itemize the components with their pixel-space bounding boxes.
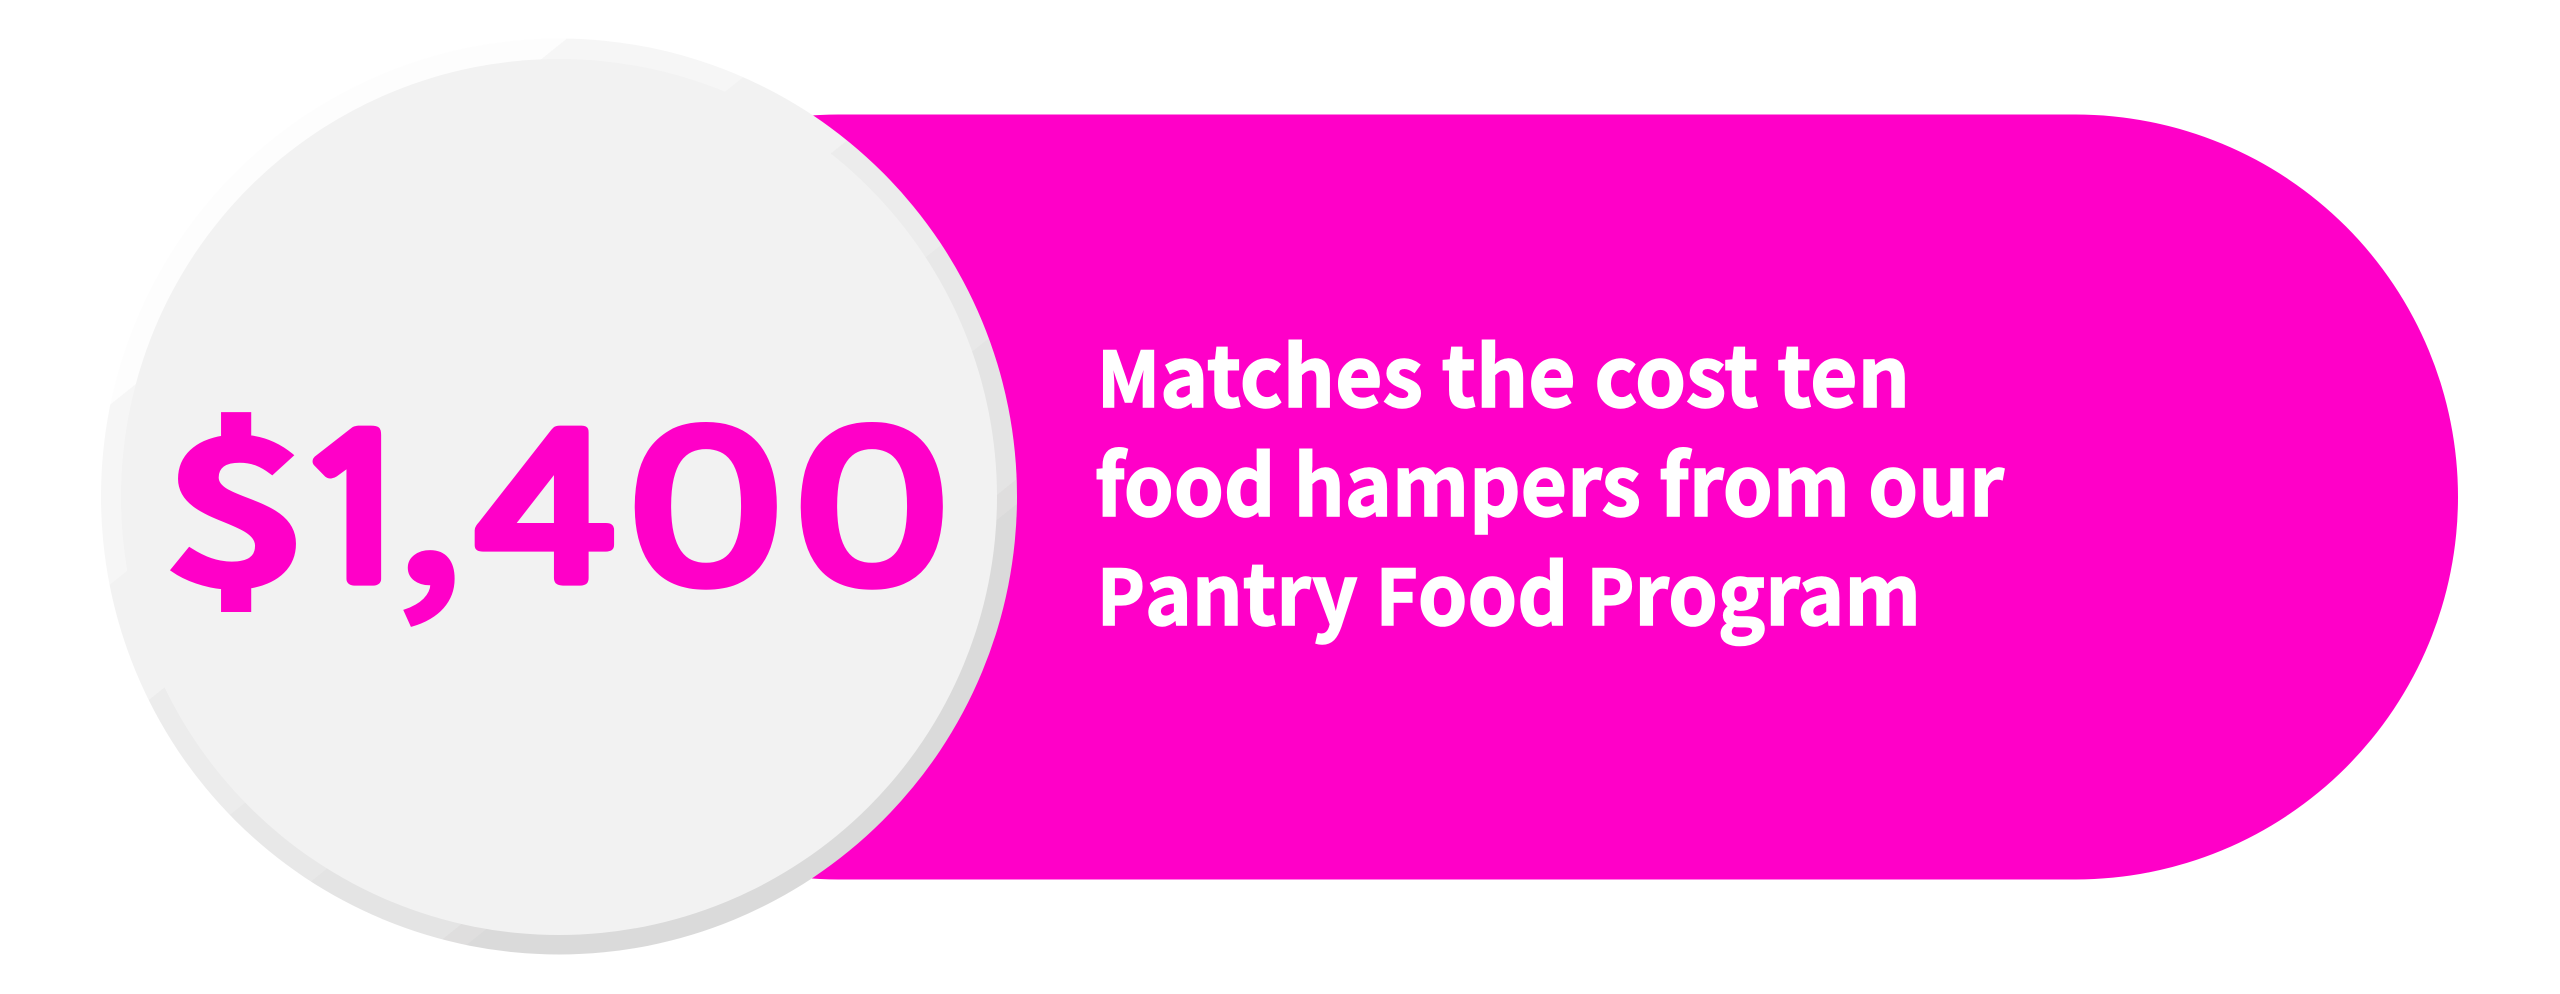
amount: $1,400: 4 — [473, 413, 616, 611]
panel: magenta pill — [456, 114, 2458, 880]
text line 3: Pantry Food Program — [1097, 529, 1921, 650]
circle: banded outer ring — [101, 38, 1017, 954]
amount: $1,400: , — [393, 365, 465, 640]
text block: description — [1095, 311, 2004, 650]
amount: $1,400: 1 — [287, 413, 430, 611]
text line 1: Matches the cost ten — [1097, 311, 1910, 432]
circle: inner disc — [121, 59, 997, 935]
circle badge — [101, 38, 1017, 954]
amount: $1,400: 0 — [788, 408, 954, 618]
text line 2: food hampers from our — [1095, 420, 2004, 541]
amount: $1,400: $ — [161, 352, 311, 644]
amount: $1,400: 0 — [622, 408, 788, 618]
